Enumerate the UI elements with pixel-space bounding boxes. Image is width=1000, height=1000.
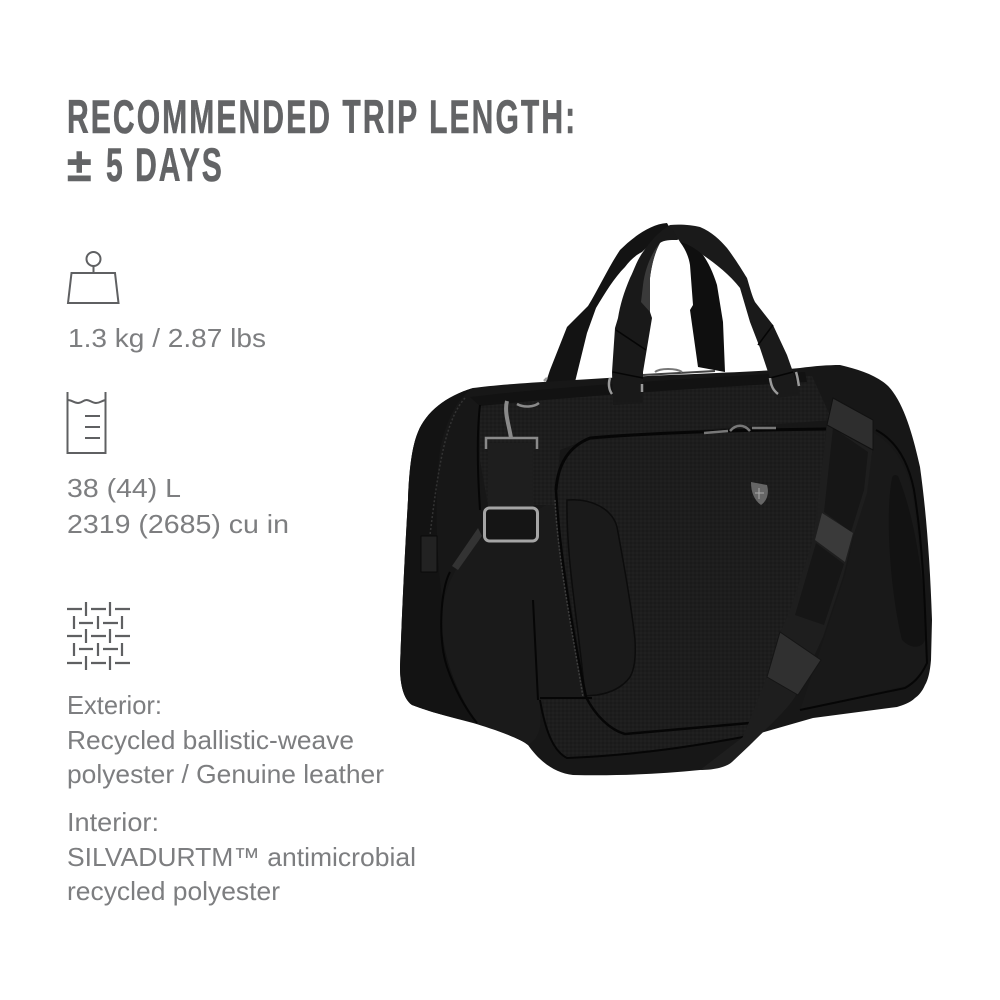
strap metal swivel hook	[486, 401, 539, 449]
bag body	[400, 365, 932, 775]
front-right handle with leather tab	[670, 225, 800, 398]
volume text	[67, 473, 289, 539]
lower front panel	[540, 697, 750, 758]
pocket zipper pull	[704, 426, 776, 433]
icon: weight	[68, 252, 118, 303]
handle tab stitching	[613, 325, 793, 378]
title	[67, 91, 575, 192]
interior material text	[67, 807, 416, 906]
seams and zips	[430, 398, 927, 758]
strap metal slider buckle	[484, 508, 538, 541]
right side rounded panel	[889, 475, 925, 647]
strap middle leather patch	[815, 513, 853, 562]
title: RECOMMENDED TRIP LENGTH:	[67, 91, 575, 144]
back-left handle	[546, 223, 672, 382]
exterior material text: Exterior:	[67, 690, 162, 720]
title: 5 DAYS	[106, 139, 222, 192]
zip leather pull	[421, 536, 437, 572]
front pocket	[556, 430, 826, 734]
strap upper leather patch	[827, 398, 873, 450]
left lower panel	[442, 500, 586, 745]
icon: woven fabric	[67, 602, 130, 670]
exterior material text	[67, 690, 384, 789]
interior material text: SILVADURTM™ antimicrobial	[67, 842, 416, 872]
exterior material text: polyester / Genuine leather	[67, 759, 384, 789]
volume text: 2319 (2685) cu in	[67, 509, 289, 539]
exterior material text: Recycled ballistic-weave	[67, 725, 354, 755]
front-left handle with leather tab	[612, 225, 690, 405]
main zip tape	[555, 500, 583, 697]
side zip pull	[452, 528, 482, 570]
right side panel	[800, 430, 927, 710]
strap padded mesh	[795, 428, 868, 625]
handle metal rings	[544, 372, 799, 394]
title: ±	[67, 139, 92, 191]
volume text: 38 (44) L	[67, 473, 181, 503]
weight text: 1.3 kg / 2.87 lbs	[68, 323, 266, 353]
left side panel shade	[400, 388, 477, 723]
back-right handle webbing	[680, 240, 725, 372]
pocket rounded panel	[567, 500, 635, 696]
interior material text: recycled polyester	[67, 876, 280, 906]
front-left handle leather lining	[641, 243, 660, 312]
icon: volume container	[68, 392, 106, 453]
top zipper pull	[643, 369, 715, 375]
interior material text: Interior:	[67, 807, 159, 837]
Victorinox shield badge	[751, 482, 768, 505]
top band	[480, 376, 832, 505]
strap lower leather patch	[767, 632, 821, 695]
top seam band	[470, 372, 807, 406]
left strap webbing	[488, 443, 533, 509]
shoulder strap	[700, 398, 873, 770]
product: black duffel bag	[400, 223, 932, 775]
